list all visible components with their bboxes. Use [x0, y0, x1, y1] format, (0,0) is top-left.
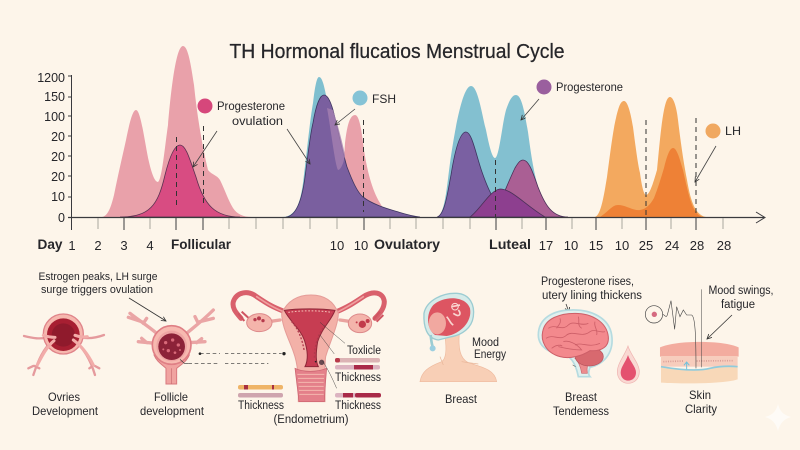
curve: estrogen follicular [102, 46, 252, 217]
label: skin clarity [685, 388, 717, 416]
icon: uterus [225, 293, 384, 402]
legend: progesterone ovulation: ovulation [232, 116, 283, 128]
legend: FSH: FSH [372, 92, 396, 106]
x axis labels: 10 [564, 238, 578, 253]
curve: progesterone follicular [120, 145, 240, 217]
curve: magenta luteal [492, 160, 568, 217]
icon: brain [538, 310, 612, 377]
annotation: mood swings: fatigue [721, 299, 755, 311]
x axis labels: 10 [330, 238, 344, 253]
icon: nerve signal [645, 301, 696, 368]
annotation: mood swings: Mood swings, [708, 285, 774, 297]
x axis labels: 10 [615, 238, 629, 253]
x axis labels [38, 236, 731, 253]
label: follicle development: Follicle [154, 390, 188, 404]
icon: follicle [128, 310, 220, 384]
icon: skin cross-section [660, 289, 739, 383]
annotation: estrogen peaks: Estrogen peaks, LH surge [38, 271, 158, 283]
label: breast tenderness: Breast [565, 390, 598, 404]
x axis labels: 17 [539, 238, 553, 253]
callout lines [320, 322, 345, 388]
x axis labels: Luteal [489, 236, 531, 252]
icon: ovary [24, 314, 104, 375]
x axis labels: 4 [146, 238, 154, 253]
x axis labels: 10 [354, 238, 368, 253]
legend: LH [695, 124, 741, 182]
label: follicle development [140, 390, 205, 418]
label: thickness right [335, 393, 381, 412]
label: ovaries development: Development [32, 404, 99, 418]
x axis labels: 25 [639, 238, 653, 253]
label: toxlicle with bars [335, 345, 381, 384]
label: thickness right: Thickness [335, 400, 381, 412]
label: thickness left: Thickness [238, 400, 284, 412]
hormone chart [37, 46, 765, 253]
dashed guide lines [176, 118, 696, 217]
cervix [295, 368, 327, 402]
label: toxlicle with bars: Thickness [335, 372, 381, 384]
label: breast tenderness [553, 390, 609, 418]
label: skin clarity: Skin [689, 388, 711, 402]
label: ovaries development: Ovries [48, 390, 80, 404]
x axis labels: 28 [717, 238, 731, 253]
x axis labels: 1 [68, 238, 76, 253]
curve: dark orange [600, 148, 703, 217]
x axis labels: 24 [665, 238, 679, 253]
label: breast: Breast [445, 392, 478, 406]
y axis labels: 20 [51, 150, 65, 164]
y axis labels: 100 [44, 110, 65, 124]
legend: LH: LH [725, 124, 741, 138]
annotation: estrogen peaks: surge triggers ovulation [41, 284, 153, 296]
watermark sparkle [765, 404, 791, 431]
y axis labels: 0 [58, 211, 65, 225]
x axis labels: 3 [120, 238, 128, 253]
label: endometrium: (Endometrium) [274, 414, 349, 426]
fallopian tubes [233, 293, 384, 322]
x axis labels: 28 [690, 238, 704, 253]
annotation: progesterone rises: Progesterone rises, [541, 276, 634, 288]
annotation: estrogen peaks [38, 271, 166, 321]
icon: blood drop [617, 346, 639, 383]
legend: progesterone [521, 80, 623, 120]
ovaries [247, 314, 272, 332]
x axis labels: 2 [94, 238, 102, 253]
uterus body [282, 295, 338, 402]
legend: progesterone ovulation [193, 98, 310, 167]
annotation: progesterone rises [541, 276, 642, 312]
annotation: mood swings [707, 285, 774, 339]
y axis labels: 150 [44, 90, 65, 104]
curve: blue ovulatory [282, 77, 340, 217]
annotation: progesterone rises: utery lining thickens [542, 290, 642, 302]
y axis labels [37, 71, 65, 225]
label: ovaries development [32, 390, 99, 418]
x axis labels: 15 [589, 238, 603, 253]
label: mood energy: Mood [472, 337, 499, 349]
label: toxlicle with bars: Toxlicle [347, 345, 381, 357]
y axis labels: 20 [51, 130, 65, 144]
curve: pink ovulatory [340, 115, 396, 217]
label: thickness left [238, 385, 284, 412]
label: follicle development: development [140, 404, 205, 418]
label: mood energy: Energy [474, 349, 506, 361]
label: mood energy [472, 337, 506, 361]
legend: FSH [335, 90, 396, 125]
endometrium [284, 309, 335, 367]
title: TH Hormonal flucatios Menstrual Cycle [230, 40, 564, 63]
curve: purple luteal [437, 132, 520, 217]
label: breast tenderness: Tendemess [553, 404, 609, 418]
curve: purple low bump [470, 189, 545, 217]
y axis labels: 1200 [37, 71, 65, 85]
y axis labels: 10 [51, 190, 65, 204]
curve: orange [595, 97, 706, 217]
legend: progesterone: Progesterone [556, 82, 623, 94]
curve: blue luteal [437, 86, 563, 217]
x axis labels: Ovulatory [374, 236, 440, 252]
legend: progesterone ovulation: Progesterone [217, 101, 285, 113]
x axis labels: Follicular [171, 236, 232, 252]
curve: purple ovulatory [286, 95, 420, 217]
curve: overlap highlight [327, 108, 345, 170]
y axis labels: 20 [51, 170, 65, 184]
x axis labels: Day [38, 236, 63, 252]
axes [68, 75, 765, 230]
icon: breast and neck figure [420, 293, 497, 382]
label: skin clarity: Clarity [685, 402, 717, 416]
